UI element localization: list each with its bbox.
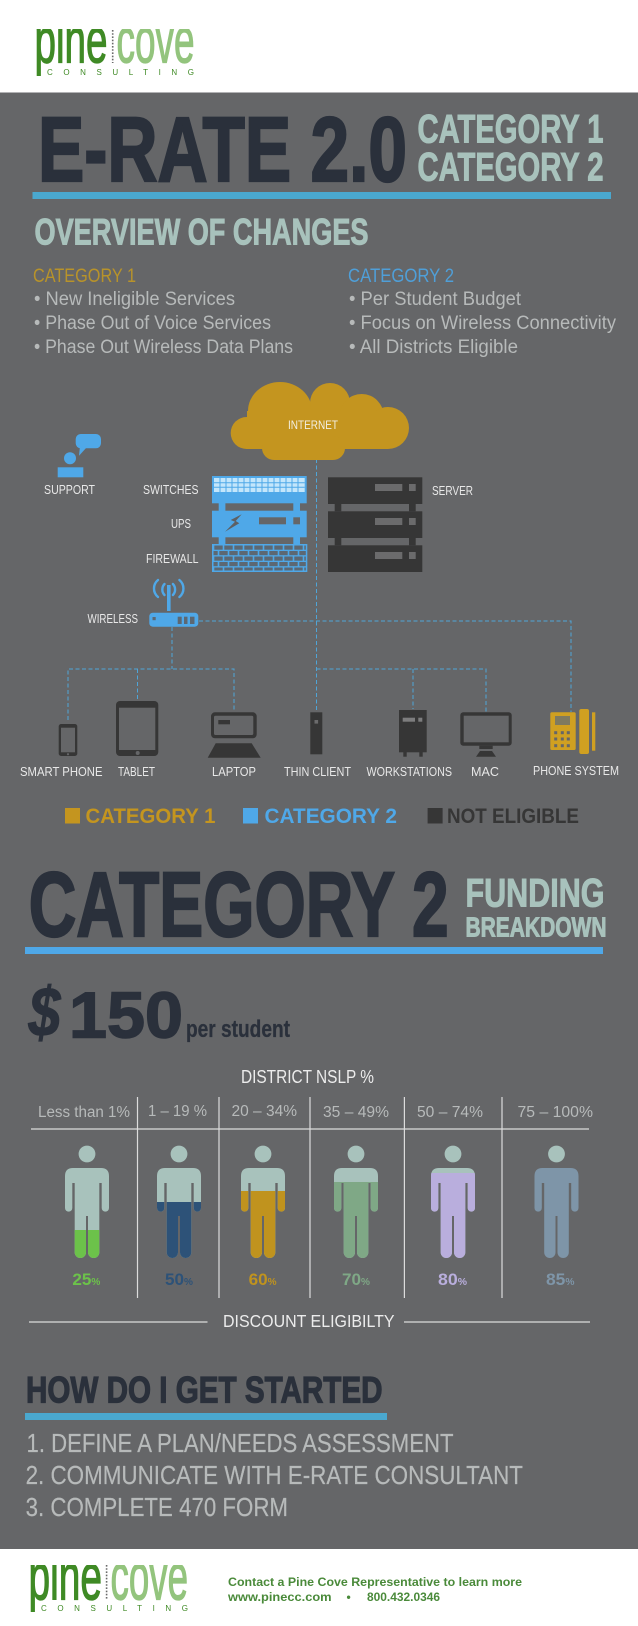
text block: steps: 3. COMPLETE 470 FORM [26, 1494, 288, 1522]
text block: category 1 changes: • Phase Out Wireless Data Plans [34, 337, 293, 358]
footer contact text [227, 1575, 522, 1604]
icon: switches [212, 476, 307, 503]
footer logo: cove [110, 1540, 188, 1614]
text block: category 1 changes [33, 265, 293, 358]
label: ups: UPS [171, 517, 191, 531]
text block: category 2 changes: • Focus on Wireless Connectivity [349, 313, 616, 334]
device labels: WORKSTATIONS [366, 765, 452, 779]
discount percentages: 25% [72, 1270, 100, 1289]
icon: switches, UPS and firewall stack [212, 476, 307, 572]
device labels [20, 764, 619, 779]
icon: mac monitor [460, 712, 512, 757]
budget: $150 per student: 150 [69, 978, 183, 1052]
text block: steps: 1. DEFINE A PLAN/NEEDS ASSESSMENT [26, 1430, 454, 1458]
title: E-RATE 2.0: E-RATE 2.0 [38, 99, 407, 201]
legend: CATEGORY 2 [264, 804, 397, 828]
discount percentages: 60% [249, 1270, 277, 1289]
device labels: LAPTOP [212, 765, 256, 779]
discount percentages: 80% [438, 1270, 467, 1289]
footer contact text: • [346, 1590, 351, 1604]
text block: steps: 2. COMMUNICATE WITH E-RATE CONSULTANT [26, 1462, 523, 1490]
device labels: PHONE SYSTEM [533, 764, 619, 778]
footer logo: CONSULTING [41, 1604, 188, 1613]
person chart: 50% [157, 1146, 201, 1258]
table column headers: 50 – 74% [417, 1104, 483, 1121]
table column headers: Less than 1% [38, 1104, 130, 1121]
discount percentages: 50% [165, 1270, 193, 1289]
text block: category 1 changes: • New Ineligible Services [34, 289, 235, 310]
label: switches: SWITCHES [143, 483, 198, 497]
subtitle: funding breakdown [466, 872, 606, 942]
label: support: SUPPORT [44, 483, 95, 497]
footer contact text: 800.432.0346 [367, 1590, 440, 1604]
heading: overview of changes: OVERVIEW OF CHANGES [34, 210, 368, 252]
legend [65, 804, 579, 828]
legend: CATEGORY 1 [86, 804, 216, 828]
icon: smart phone [59, 724, 77, 756]
header logo: cove [116, 4, 194, 76]
icon: laptop [208, 712, 261, 758]
device labels: TABLET [118, 765, 155, 779]
person chart: 80% [431, 1146, 475, 1258]
header logo: CONSULTING [47, 68, 194, 77]
text block: category 1 changes: CATEGORY 1 [33, 265, 136, 287]
table column headers: 75 – 100% [518, 1104, 593, 1121]
text block: category 1 changes: • Phase Out of Voice Services [34, 313, 271, 334]
text block: category 2 changes: • All Districts Eligible [349, 337, 518, 358]
icon: workstation [399, 710, 427, 757]
discount percentages: 85% [546, 1270, 575, 1289]
header logo [36, 29, 194, 76]
person chart: 25% [65, 1146, 109, 1258]
footer contact text: www.pinecc.com [227, 1590, 332, 1604]
table footer: discount eligibility: DISCOUNT ELIGIBILTY [223, 1311, 395, 1331]
text block: category 2 changes: CATEGORY 2 [348, 265, 454, 287]
text block: steps [26, 1430, 523, 1522]
icon: internet cloud [231, 382, 409, 460]
device labels: MAC [471, 765, 499, 779]
header logo: pine [34, 4, 108, 76]
person chart: 85% [534, 1146, 578, 1258]
title: category 2: CATEGORY 2 [29, 854, 449, 956]
footer logo: pine [28, 1540, 102, 1614]
table heading: district NSLP: DISTRICT NSLP % [241, 1067, 374, 1087]
label: wireless: WIRELESS [88, 612, 138, 626]
icon: firewall [212, 544, 307, 572]
network connector lines [68, 459, 571, 720]
icon: thin client [310, 712, 322, 754]
subtitle: categories [418, 108, 604, 190]
icon: wireless router [149, 580, 198, 627]
heading: how do I get started: HOW DO I GET STARTED [26, 1368, 382, 1410]
table column headers [38, 1103, 593, 1121]
table column headers: 35 – 49% [323, 1104, 389, 1121]
icon: server (not eligible) [328, 477, 422, 572]
footer contact text: Contact a Pine Cove Representative to learn more [228, 1575, 522, 1589]
table column headers: 20 – 34% [232, 1103, 297, 1120]
device labels: SMART PHONE [20, 765, 102, 779]
device labels: THIN CLIENT [284, 765, 351, 779]
discount percentages [72, 1270, 575, 1289]
icon: tablet [116, 701, 158, 756]
text block: category 2 changes: • Per Student Budget [349, 289, 522, 310]
legend: NOT ELIGIBLE [447, 804, 579, 828]
discount percentages: 70% [342, 1270, 370, 1289]
text block: category 2 changes [348, 265, 616, 358]
icon: phone system [550, 709, 595, 754]
icon: support [58, 434, 101, 477]
budget: $150 per student [28, 973, 290, 1052]
icon: UPS [212, 511, 307, 537]
icon: internet cloud: INTERNET [288, 420, 338, 432]
footer logo [30, 1565, 188, 1612]
person chart: 70% [334, 1146, 378, 1258]
label: server: SERVER [432, 484, 473, 498]
label: firewall: FIREWALL [146, 552, 199, 566]
person chart: 60% [241, 1146, 285, 1258]
table column headers: 1 – 19 % [148, 1103, 207, 1120]
budget: $150 per student: per student [186, 1016, 290, 1043]
budget: $150 per student: $ [28, 973, 61, 1051]
